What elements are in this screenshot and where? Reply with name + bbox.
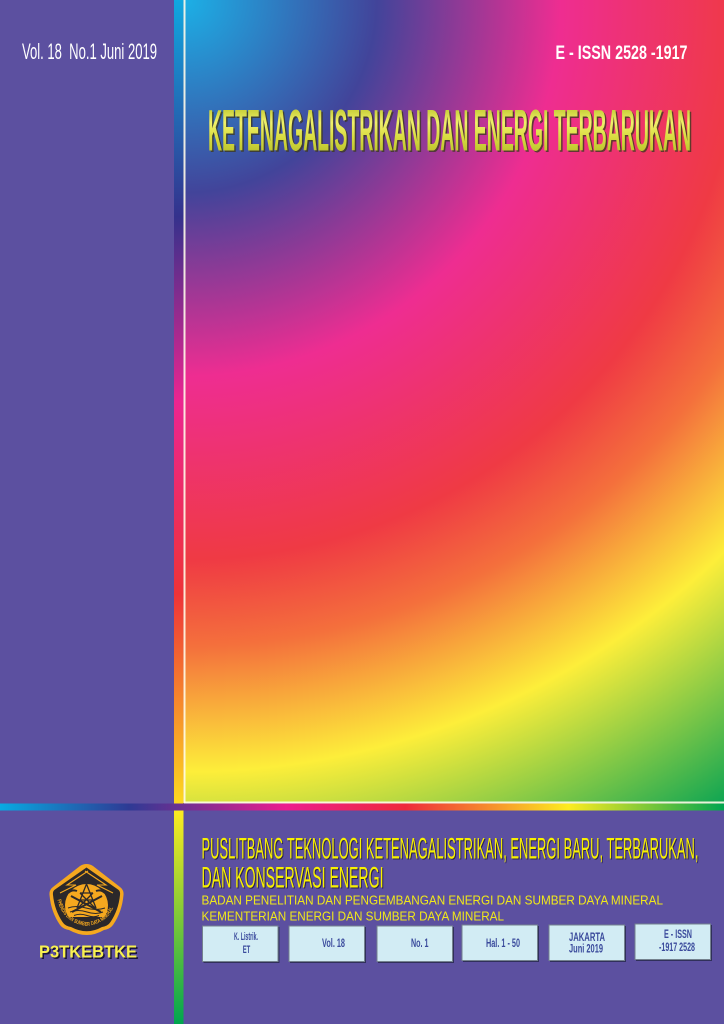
info box: place and date: JAKARTA bbox=[569, 930, 605, 944]
info box: K. Listrik bbox=[202, 926, 280, 963]
volume line: Vol. 18 No.1 Juni 2019 bbox=[22, 39, 157, 64]
info box: pages: Hal. 1 - 50 bbox=[486, 936, 520, 950]
agency line: BADAN PENELITIAN DAN PENGEMBANGAN ENERGI DAN SUMBER DAYA MINERAL bbox=[202, 892, 663, 908]
organization name: P3TKEBTKE bbox=[40, 943, 138, 963]
info box: place and date bbox=[549, 925, 626, 962]
info box: K. Listrik: ET bbox=[243, 944, 250, 956]
institution heading: DAN KONSERVASI ENERGI bbox=[202, 862, 384, 894]
icon: ministry emblem: PHENDIS DAN SUMBER DATA MINERAL bbox=[58, 899, 114, 926]
organization name: P3TKEBTKE bbox=[39, 942, 137, 962]
icon: ministry emblem bbox=[49, 864, 124, 935]
info box: K. Listrik: K. Listrik. bbox=[234, 931, 258, 943]
institution heading bbox=[202, 832, 700, 896]
gradient cover panel bbox=[184, 0, 724, 804]
horizontal rainbow bar bbox=[0, 804, 724, 810]
info box: pages bbox=[462, 925, 539, 962]
info box: volume: Vol. 18 bbox=[322, 936, 345, 950]
info box: e-issn: -1917 2528 bbox=[659, 942, 695, 954]
institution heading: DAN KONSERVASI ENERGI bbox=[202, 862, 384, 896]
info box: number bbox=[377, 926, 454, 963]
info box: volume bbox=[289, 926, 366, 963]
info box: e-issn: E - ISSN bbox=[664, 929, 692, 941]
info box: number: No. 1 bbox=[411, 936, 429, 950]
info box: e-issn bbox=[635, 924, 712, 961]
ministry line: KEMENTERIAN ENERGI DAN SUMBER DAYA MINERAL bbox=[202, 908, 504, 924]
info box: place and date: Juni 2019 bbox=[569, 942, 603, 956]
vertical rainbow bar bbox=[174, 0, 184, 1024]
